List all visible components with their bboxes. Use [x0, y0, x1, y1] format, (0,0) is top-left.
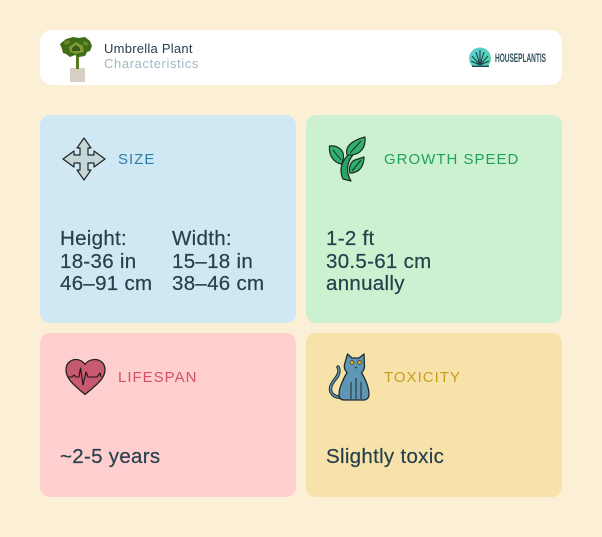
icon: four-way arrows — [62, 137, 106, 181]
icon: heart with pulse — [65, 358, 106, 396]
heading: growth speed: GROWTH SPEED — [384, 151, 519, 168]
panel: size — [40, 115, 296, 323]
panel: toxicity — [306, 333, 562, 497]
heading: toxicity: TOXICITY — [384, 369, 461, 386]
width values — [172, 227, 264, 295]
subtitle: Characteristics — [104, 56, 199, 71]
height values: 18-36 in — [60, 250, 136, 272]
panel: lifespan — [40, 333, 296, 497]
heading: size: SIZE — [118, 151, 155, 168]
width values: Width: — [172, 227, 232, 250]
height values — [60, 227, 152, 295]
lifespan value: ~2-5 years — [60, 445, 160, 468]
toxicity value: Slightly toxic — [326, 445, 444, 468]
growth values: annually — [326, 272, 405, 295]
width values: 15–18 in — [172, 250, 253, 272]
logo: houseplantis — [469, 48, 546, 67]
width values: 38–46 cm — [172, 272, 264, 295]
growth values: 1-2 ft — [326, 227, 375, 250]
icon: blue cat — [328, 353, 370, 401]
panel: growth speed — [306, 115, 562, 323]
icon: leaves — [328, 136, 366, 182]
icon: umbrella plant — [60, 37, 92, 82]
height values: 46–91 cm — [60, 272, 152, 295]
growth values — [326, 227, 432, 295]
growth values: 30.5-61 cm — [326, 250, 432, 272]
logo: houseplantis: HOUSEPLANTIS — [495, 53, 546, 65]
header bar — [40, 30, 562, 85]
heading: lifespan: LIFESPAN — [118, 369, 197, 386]
plant name: Umbrella Plant — [104, 41, 193, 56]
height values: Height: — [60, 227, 127, 250]
